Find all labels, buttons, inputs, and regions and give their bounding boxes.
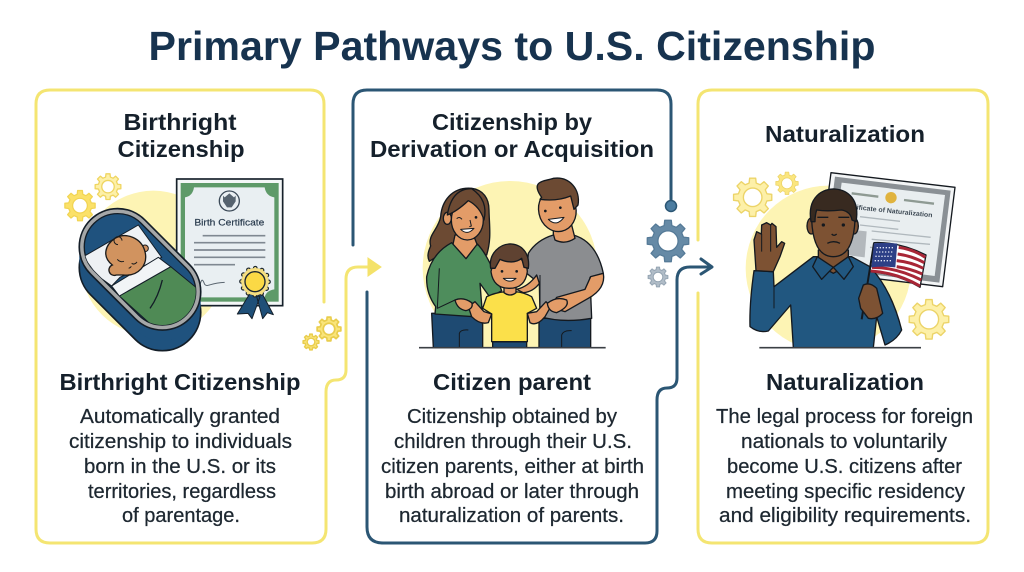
icon: small gears on connector <box>303 317 341 350</box>
description: become U.S. citizens after <box>727 456 962 478</box>
heading: Naturalization <box>765 121 925 147</box>
heading: Derivation or Acquisition <box>370 136 654 162</box>
description: meeting specific residency <box>726 481 965 503</box>
description: Automatically granted <box>80 406 280 428</box>
heading: Citizenship by <box>432 109 592 135</box>
panel: birthright citizenship <box>36 90 381 543</box>
description: citizenship to individuals <box>69 431 292 453</box>
head <box>807 218 816 234</box>
illustration: family <box>419 178 607 361</box>
neck and collar <box>818 250 848 273</box>
icon: american flag <box>862 243 926 319</box>
icon: gears <box>734 172 949 339</box>
baby head <box>106 236 148 275</box>
panel border <box>698 90 988 543</box>
raised hand <box>754 223 785 272</box>
description <box>716 406 973 527</box>
man <box>750 189 902 348</box>
ground line <box>419 345 606 350</box>
boy <box>455 244 567 348</box>
heading <box>370 109 654 162</box>
description: birth abroad or later through <box>385 481 639 503</box>
icon: gears <box>65 174 121 221</box>
title: Primary Pathways to U.S. Citizenship <box>148 23 876 69</box>
heading: Citizenship <box>118 136 244 162</box>
certificate of naturalization: Certificate of Naturalization <box>842 203 933 219</box>
description <box>69 406 292 527</box>
panel: derivation or acquisition <box>353 90 712 543</box>
description: born in the U.S. or its <box>84 456 276 478</box>
description: nationals to voluntarily <box>741 431 947 453</box>
description: The legal process for foreign <box>716 406 973 428</box>
illustration: baby in bassinet with birth certificate <box>63 174 283 367</box>
panel: naturalization <box>698 90 988 543</box>
description: children through their U.S. <box>394 431 632 453</box>
father <box>527 178 604 348</box>
yellow backdrop <box>746 186 911 351</box>
yellow backdrop <box>81 191 226 336</box>
subheading: Birthright Citizenship <box>60 369 300 395</box>
illustration: oath with flag and certificate <box>734 172 955 361</box>
description: citizen parents, either at birth <box>381 456 644 478</box>
subheading: Naturalization <box>766 369 924 395</box>
icon: blue gears <box>647 220 689 287</box>
description: of parentage. <box>122 505 240 527</box>
description: naturalization of parents. <box>399 505 624 527</box>
panel border and connector arrow <box>36 90 381 543</box>
description <box>381 406 644 527</box>
description: and eligibility requirements. <box>719 505 971 527</box>
birth certificate <box>177 179 283 306</box>
description: territories, regardless <box>88 481 276 503</box>
certificate of naturalization <box>818 173 955 287</box>
mother <box>427 188 502 348</box>
connector dot <box>666 200 676 212</box>
panel border and connector arrow <box>353 90 712 543</box>
yellow backdrop <box>423 181 597 356</box>
heading: Birthright <box>124 109 237 135</box>
hand holding flag <box>859 284 883 319</box>
clasped hands <box>455 299 472 311</box>
birth certificate: Birth Certificate <box>194 218 264 228</box>
rosette seal <box>237 268 273 319</box>
heading <box>118 109 244 162</box>
bassinet bedding <box>86 224 196 325</box>
bassinet <box>78 208 202 352</box>
description: Citizenship obtained by <box>407 406 617 428</box>
ground line <box>759 345 921 350</box>
subheading: Citizen parent <box>433 369 591 395</box>
